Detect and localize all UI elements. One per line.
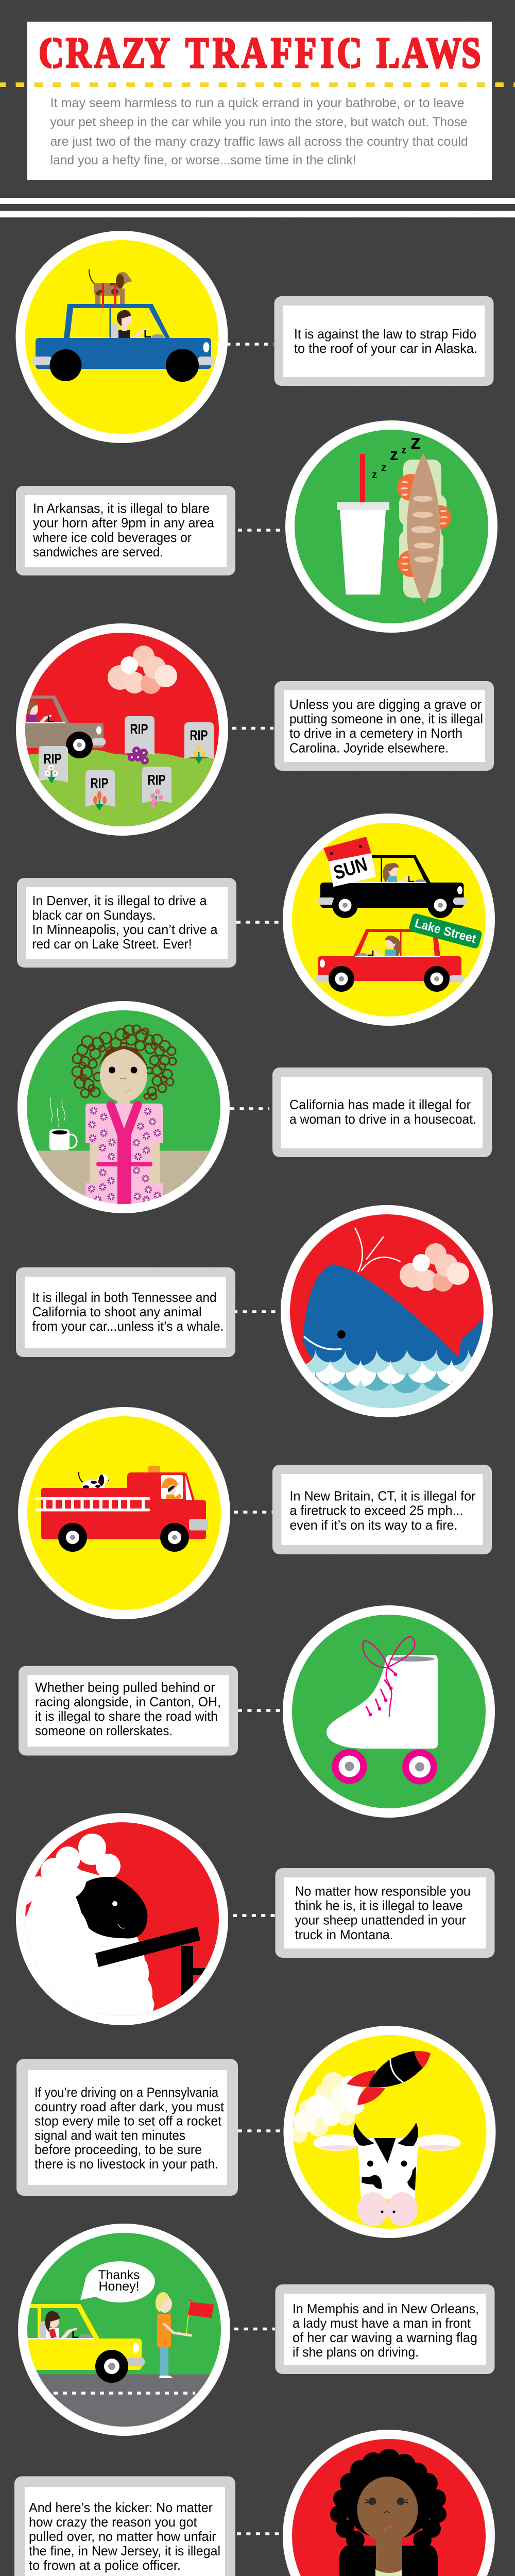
text box bbox=[272, 1067, 492, 1157]
connector bbox=[232, 727, 273, 730]
text box: black car on Sundays. bbox=[32, 907, 156, 923]
text box: truck in Montana. bbox=[295, 1927, 393, 1942]
connector bbox=[236, 921, 283, 924]
text box: a woman to drive in a housecoat. bbox=[289, 1111, 476, 1127]
curly hair bbox=[72, 1025, 176, 1099]
text box: California has made it illegal for bbox=[289, 1097, 471, 1112]
text box: sandwiches are served. bbox=[33, 544, 163, 560]
text box: it is illegal to share the road with bbox=[35, 1708, 218, 1724]
panel: law 10 Pennsylvania rocket bbox=[16, 2026, 495, 2238]
tombstones bbox=[39, 716, 214, 807]
text box: where ice cold beverages or bbox=[32, 530, 192, 545]
text box bbox=[19, 1666, 238, 1756]
illustration: drink and sleeping sandwich: z bbox=[390, 445, 398, 464]
illustration: car in a cemetery: RIP bbox=[147, 772, 166, 788]
header panel bbox=[27, 22, 492, 180]
illustration: drink and sleeping sandwich bbox=[285, 420, 497, 633]
text box: to drive in a cemetery in North bbox=[289, 725, 462, 741]
connector bbox=[237, 2532, 282, 2535]
intro text: are just two of the many crazy traffic laws all across the country that could bbox=[50, 134, 468, 149]
ladder bbox=[36, 1497, 150, 1512]
panel: law 2 Arkansas horn bbox=[16, 420, 497, 633]
cow bbox=[313, 2123, 461, 2226]
speech bubble bbox=[80, 2261, 155, 2302]
illustration: blue car with dog on the roof bbox=[15, 231, 228, 443]
text box bbox=[16, 486, 235, 575]
connector bbox=[234, 1511, 272, 1514]
illustration: roller skate bbox=[283, 1605, 495, 1818]
text box bbox=[17, 878, 236, 968]
text box: even if it’s on its way to a fire. bbox=[289, 1517, 457, 1533]
illustration: firetruck with dalmatian bbox=[18, 1407, 230, 1619]
connector bbox=[217, 343, 274, 346]
text box: In Denver, it is illegal to drive a bbox=[32, 893, 207, 908]
waves bbox=[306, 1350, 472, 1408]
text box: And here’s the kicker: No matter bbox=[29, 2500, 213, 2515]
text box: Unless you are digging a grave or bbox=[289, 697, 482, 712]
connector bbox=[233, 1914, 275, 1917]
illustration: car in a cemetery bbox=[16, 623, 228, 836]
connector bbox=[238, 1709, 283, 1712]
text box: your sheep unattended in your bbox=[295, 1912, 466, 1928]
intro text: your pet sheep in the car while you run into the store, but watch out. Those bbox=[50, 115, 468, 129]
panel: law 9 sheep in Montana bbox=[16, 1813, 494, 2040]
text box bbox=[272, 1465, 492, 1554]
text box: to frown at a police officer. bbox=[29, 2557, 181, 2573]
flowers bbox=[45, 744, 205, 810]
rocket bbox=[347, 2051, 431, 2105]
illustration: woman in a housecoat with coffee bbox=[18, 1001, 230, 1213]
panel: law 6 whale bbox=[16, 1205, 499, 1422]
text box bbox=[274, 681, 494, 771]
illustration: whale in waves bbox=[281, 1205, 499, 1422]
connector bbox=[238, 529, 285, 532]
text box: pulled over, no matter how unfair bbox=[29, 2529, 216, 2544]
text box: In Memphis and in New Orleans, bbox=[293, 2301, 479, 2316]
illustration: car in a cemetery: RIP bbox=[91, 775, 108, 791]
title: CRAZY TRAFFIC LAWS bbox=[39, 28, 481, 77]
coffee mug bbox=[49, 1097, 77, 1150]
text box: a lady must have a man in front bbox=[293, 2315, 471, 2331]
text box: to the roof of your car in Alaska. bbox=[294, 341, 477, 356]
text box: putting someone in one, it is illegal bbox=[289, 711, 483, 726]
text box: there is no livestock in your path. bbox=[35, 2156, 218, 2172]
connector bbox=[238, 2129, 284, 2132]
speech bubble: Thanks bbox=[98, 2268, 140, 2282]
text box bbox=[16, 1267, 235, 1357]
illustration: rocket and cow bbox=[283, 2026, 495, 2238]
hair bbox=[330, 2449, 447, 2549]
panel: law 8 rollerskates bbox=[19, 1605, 495, 1818]
illustration: sheep in a truck bbox=[16, 1813, 228, 2040]
text box: In New Britain, CT, it is illegal for bbox=[289, 1488, 476, 1503]
black car bbox=[318, 855, 467, 918]
text box: country road after dark, you must bbox=[35, 2099, 225, 2114]
text box: signal and wait ten minutes bbox=[35, 2128, 185, 2143]
text box: your horn after 9pm in any area bbox=[33, 515, 215, 531]
text box: think he is, it is illegal to leave bbox=[295, 1898, 463, 1913]
panel: law 4 Denver and Minneapolis bbox=[17, 814, 495, 1026]
text box: before proceeding, to be sure bbox=[35, 2142, 202, 2157]
panel: law 3 North Carolina cemetery bbox=[16, 623, 494, 836]
text box: red car on Lake Street. Ever! bbox=[32, 936, 192, 952]
connector bbox=[230, 1107, 269, 1110]
illustration: man waving a flag in front of a car bbox=[18, 2224, 230, 2439]
text box bbox=[275, 1868, 494, 1958]
illustration: drink and sleeping sandwich: z bbox=[372, 469, 377, 481]
text box bbox=[274, 296, 493, 386]
text box: from your car...unless it’s a whale. bbox=[32, 1318, 224, 1334]
calendar sign bbox=[323, 837, 376, 887]
street sign: Lake Street bbox=[413, 917, 477, 946]
illustration: car in a cemetery: RIP bbox=[130, 721, 148, 737]
text box: Whether being pulled behind or bbox=[35, 1680, 215, 1695]
panel: law 1 Alaska dog on roof bbox=[15, 231, 493, 443]
text box: It is against the law to strap Fido bbox=[294, 326, 476, 342]
text box: In Arkansas, it is illegal to blare bbox=[33, 501, 210, 516]
text box bbox=[275, 2284, 494, 2374]
text box: the fine, in New Jersey, it is illegal bbox=[29, 2543, 220, 2558]
intro text: It may seem harmless to run a quick errand in your bathrobe, or to leave bbox=[50, 96, 465, 110]
laces bbox=[363, 1637, 415, 1717]
illustration: drink and sleeping sandwich: z bbox=[381, 462, 386, 473]
speech bubble: Honey! bbox=[99, 2279, 139, 2294]
text box: of her car waving a warning flag bbox=[293, 2330, 477, 2345]
text box: how crazy the reason you got bbox=[29, 2514, 197, 2530]
robe flowers bbox=[89, 1108, 160, 1202]
man with flag bbox=[156, 2292, 214, 2378]
connector bbox=[233, 1310, 280, 1313]
illustration: frowning woman bbox=[283, 2430, 495, 2576]
text box: No matter how responsible you bbox=[295, 1884, 471, 1899]
text box: if she plans on driving. bbox=[293, 2344, 419, 2360]
red car bbox=[315, 929, 465, 992]
text box: stop every mile to set off a rocket bbox=[35, 2113, 222, 2129]
intro text: land you a hefty fine, or worse...some time in the clink! bbox=[50, 153, 356, 167]
illustration: drink and sleeping sandwich: z bbox=[410, 431, 421, 453]
text box: It is illegal in both Tennessee and bbox=[32, 1290, 216, 1305]
intro text bbox=[50, 96, 468, 167]
text box: In Minneapolis, you can’t drive a bbox=[32, 922, 218, 937]
text box: a firetruck to exceed 25 mph... bbox=[289, 1502, 464, 1518]
illustration: car in a cemetery: RIP bbox=[190, 727, 208, 743]
illustration: drink and sleeping sandwich: z bbox=[401, 445, 406, 456]
illustration: black car on Sunday and red car on Lake Street bbox=[283, 814, 495, 1026]
calendar sign: SUN bbox=[331, 854, 370, 884]
text box bbox=[16, 2059, 238, 2196]
rocket smoke bbox=[290, 2072, 364, 2143]
text box: California to shoot any animal bbox=[32, 1304, 202, 1319]
text box bbox=[14, 2476, 235, 2576]
panel: law 7 firetruck bbox=[18, 1407, 492, 1619]
text box: racing alongside, in Canton, OH, bbox=[35, 1694, 221, 1709]
connector bbox=[234, 2328, 275, 2330]
panel: law 5 California housecoat bbox=[18, 1001, 492, 1213]
dalmatian bbox=[79, 1472, 109, 1488]
text box: someone on rollerskates. bbox=[35, 1723, 173, 1738]
text box: Carolina. Joyride elsewhere. bbox=[289, 740, 449, 755]
panel: law 11 Memphis and New Orleans flag bbox=[18, 2224, 494, 2439]
panel: law 12 New Jersey frown bbox=[14, 2430, 495, 2576]
text box: If you’re driving on a Pennsylvania bbox=[35, 2084, 218, 2100]
illustration: car in a cemetery: RIP bbox=[43, 751, 62, 767]
